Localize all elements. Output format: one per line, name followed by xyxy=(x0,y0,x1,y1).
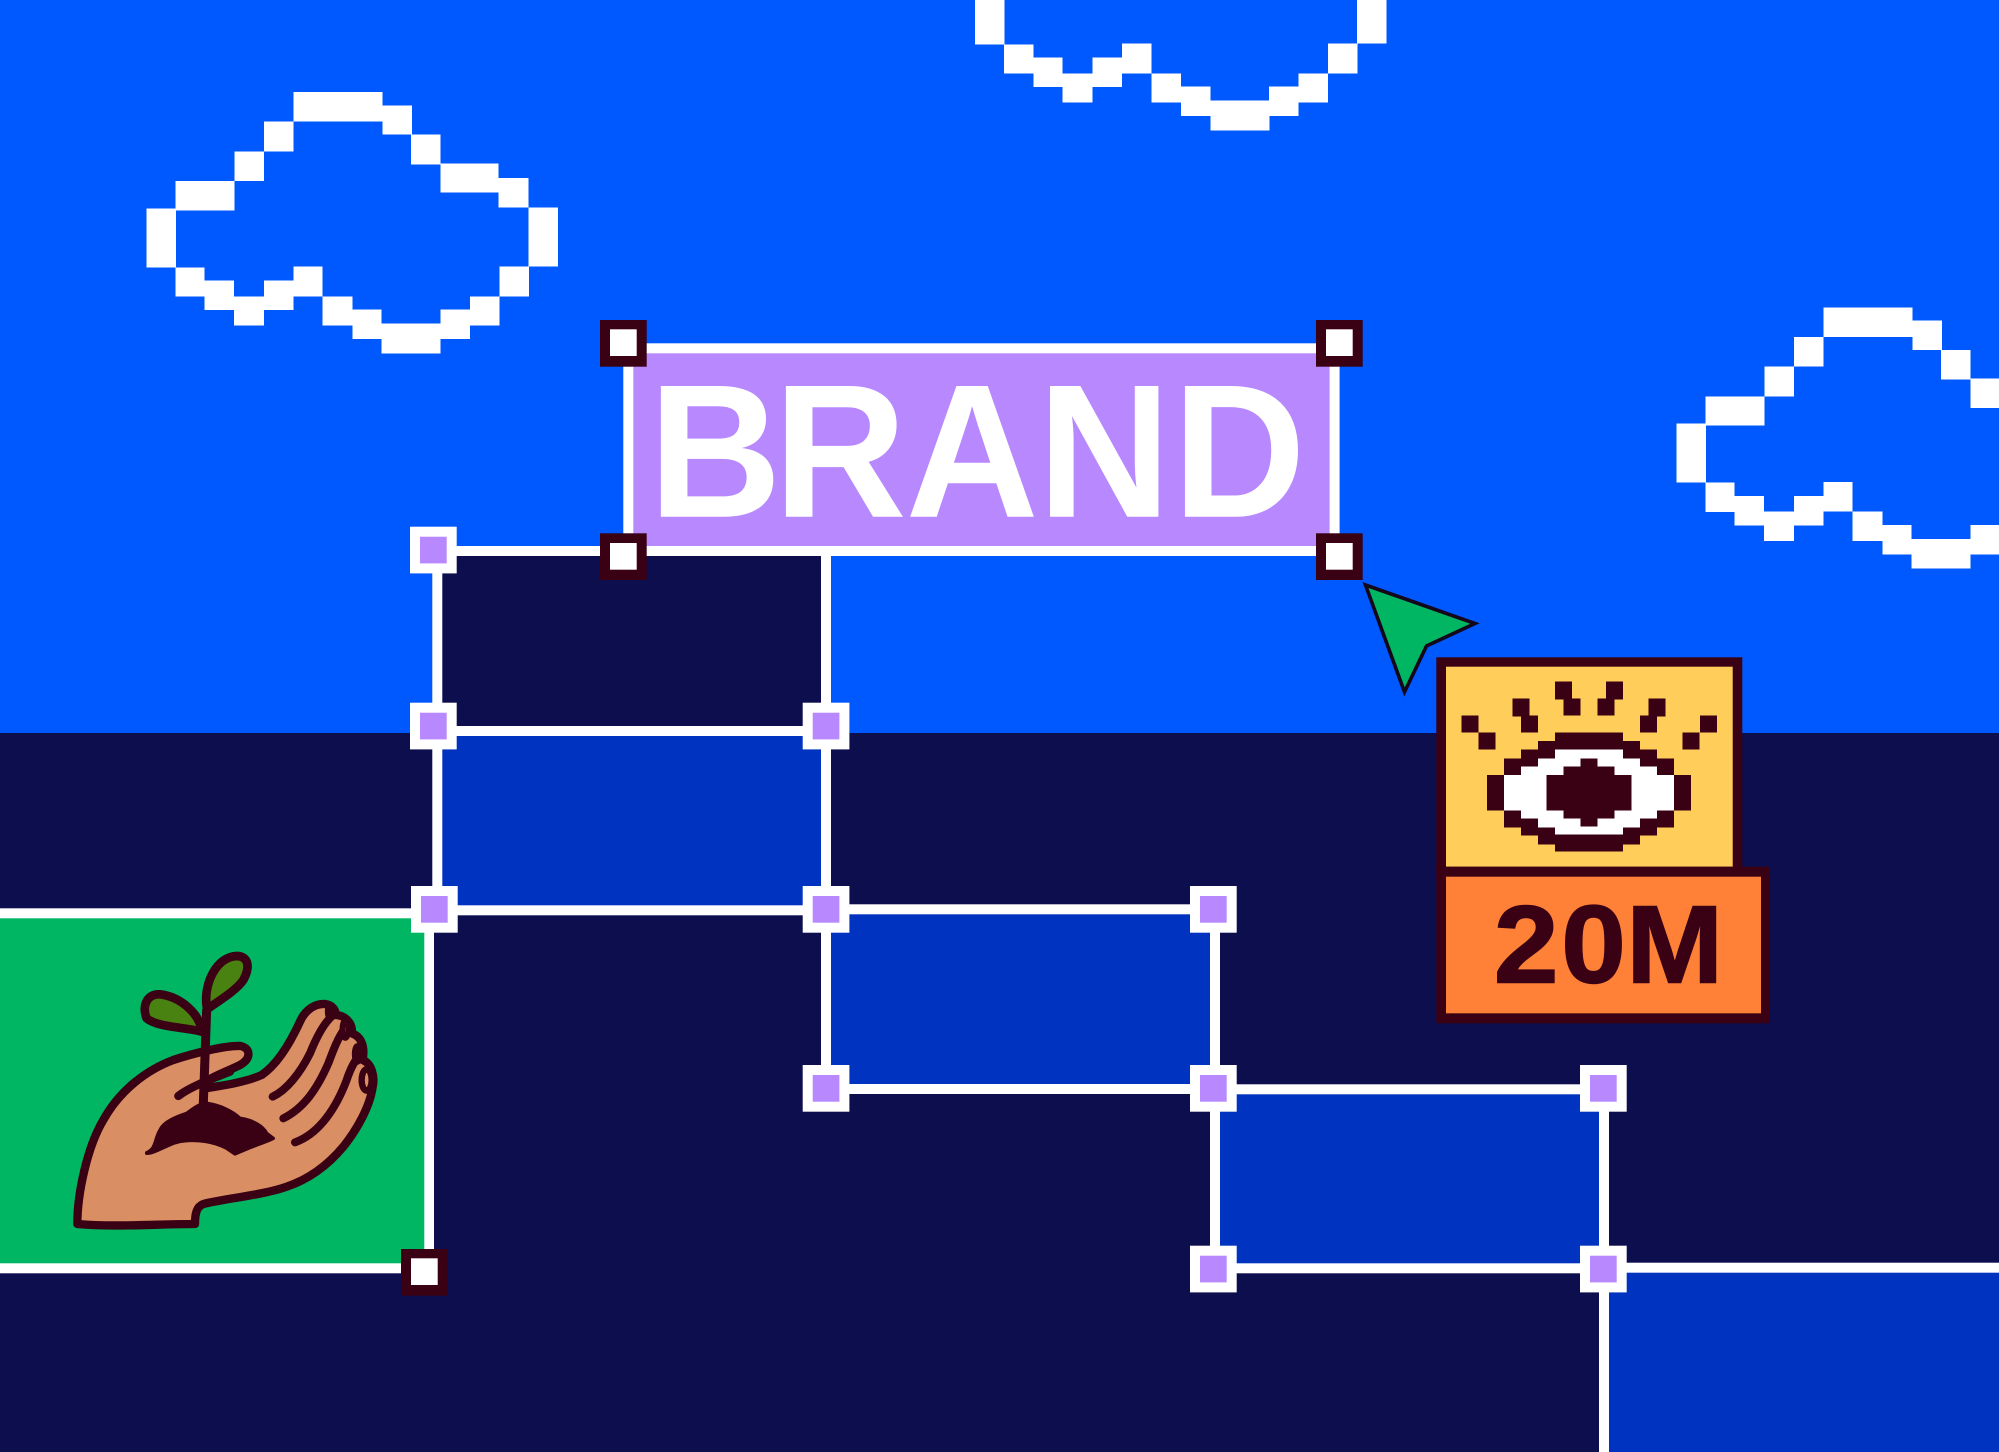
pixel cloud: top centre xyxy=(975,0,1387,130)
blue grid cell: upper left xyxy=(442,736,821,906)
sky background xyxy=(0,0,1999,733)
stat card: 20M xyxy=(1436,867,1770,1023)
dark selection handles xyxy=(401,320,1363,1296)
blue grid cell: centre xyxy=(831,914,1210,1084)
green panel with hand and sprout xyxy=(0,908,434,1273)
blue grid cell: lower right xyxy=(1220,1094,1599,1264)
dark grid cell under brand xyxy=(442,556,821,726)
grid lines xyxy=(432,546,1999,1452)
eye card xyxy=(1436,657,1742,876)
purple grid nodes xyxy=(410,527,1627,1292)
ground background xyxy=(0,733,1999,1452)
blue grid cell: bottom right corner xyxy=(1609,1272,1999,1452)
stat value: 20M xyxy=(1494,884,1723,1007)
pixel cloud: right xyxy=(1676,307,1999,569)
icon: pixel eye xyxy=(1461,681,1717,852)
brand label box xyxy=(623,343,1340,557)
arrow cursor xyxy=(1366,585,1475,692)
pixel cloud: left xyxy=(146,92,558,353)
heading: BRAND: BRAND xyxy=(649,345,1306,557)
icon: hand holding sprout xyxy=(77,956,373,1225)
